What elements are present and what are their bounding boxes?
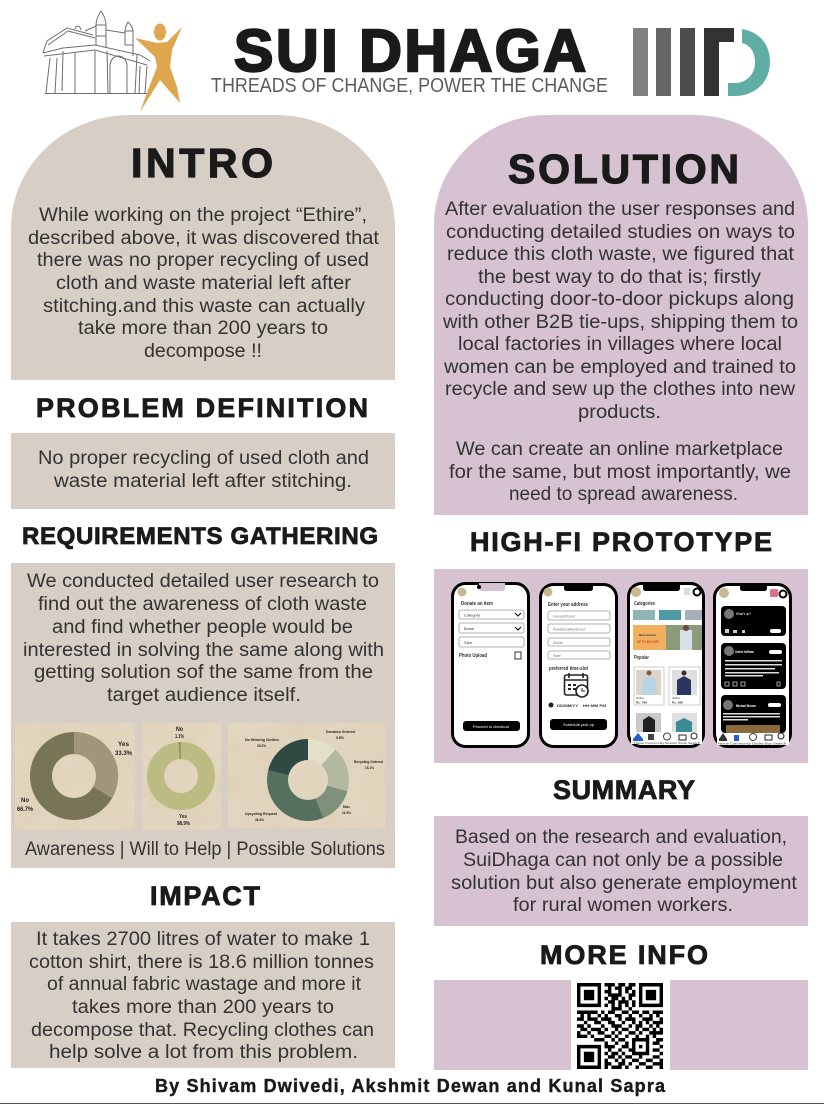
heading: more info: MORE INFO (540, 940, 708, 970)
phone: enter your address: Schedule pick up (563, 722, 595, 727)
heading: requirements gathering: REQUIREMENTS GATHERING (22, 523, 378, 550)
chart: awareness donut: No (21, 798, 29, 804)
panel: impact: takes more than 200 years to (72, 997, 334, 1018)
phone: donate an item: Brand (464, 626, 474, 631)
requirements text (23, 571, 384, 706)
phone: categories and popular: Categories (634, 601, 655, 607)
panel: impact: It takes 2700 litres of water to make 1 (36, 929, 370, 950)
phone: categories and popular: UP TO 60% OFF (637, 640, 660, 644)
heading: intro: INTRO (131, 140, 273, 186)
solution text: conducting door-to-door pickups along (445, 289, 794, 310)
solution text: local factories in villages where local (458, 334, 782, 355)
panel: impact: help solve a lot from this problem. (49, 1042, 358, 1063)
chart: will to help donut: No (176, 727, 183, 733)
phone: enter your address (540, 584, 616, 746)
phone: enter your address: District (553, 640, 564, 645)
intro text: stitching.and this waste can actually (43, 296, 366, 317)
solution text: After evaluation the user responses and (445, 199, 795, 220)
phone: categories and popular (628, 583, 704, 746)
chart: will to help donut: 98.9% (177, 821, 190, 827)
heading: summary: SUMMARY (553, 775, 695, 805)
phone: enter your address: HH:MM PM (583, 703, 607, 708)
phone: categories and popular: Rs. 699 (672, 700, 683, 704)
solution text (442, 199, 798, 505)
heading: impact: IMPACT (150, 881, 260, 911)
requirements text: interested in solving the same along with (23, 640, 384, 661)
intro text: decompose !! (144, 341, 262, 362)
phone: community feed: Michael Brown (736, 704, 756, 708)
solution text: reduce this cloth waste, we figured that (447, 244, 795, 265)
panel: impact: decompose that. Recycling clothes can (31, 1020, 374, 1041)
subtitle: THREADS OF CHANGE, POWER THE CHANGE (211, 75, 608, 97)
solution text: conducting detailed studies on ways to (446, 222, 795, 243)
requirements text: getting solution sof the same from the (34, 662, 373, 683)
chart: possible solutions donut: Recycling Ordered (354, 760, 383, 764)
phone: enter your address: DD/MM/YY (557, 703, 578, 708)
phone: enter your address: Enter your address (548, 602, 588, 608)
phone: categories and popular: Mens fashion (639, 633, 656, 637)
phone: enter your address: preferred time-slot (549, 666, 588, 672)
phone: enter your address: Area/locality/street (553, 626, 586, 632)
panel: problem definition (11, 433, 395, 509)
phone: categories and popular: Rs. 799 (636, 700, 647, 704)
solution text: the best way to do that is; firstly (478, 267, 762, 288)
panel: impact (11, 922, 395, 1068)
intro text (28, 205, 380, 362)
chart: awareness donut: 33.3% (115, 751, 133, 757)
solution text: recycle and sew up the clothes into new (445, 379, 795, 400)
phone: categories and popular: Popular (634, 655, 649, 661)
chart: will to help donut (142, 723, 221, 830)
logo: golden figure (135, 24, 182, 112)
phone: community feed: Home Community Outfits Buy Search (718, 742, 787, 746)
panel: summary: solution but also generate employment (451, 873, 798, 894)
chart: possible solutions donut: Misc (343, 805, 350, 809)
chart: possible solutions donut (228, 723, 385, 828)
phone: community feed (714, 584, 790, 746)
chart: awareness donut (15, 723, 135, 830)
requirements text: and find whether people would be (52, 617, 353, 638)
solution text: for the same, but most importantly, we (449, 462, 791, 483)
heading: solution: SOLUTION (508, 146, 739, 192)
chart: will to help donut: Yes (179, 814, 187, 820)
chart: possible solutions donut: Upcycling Request (245, 812, 278, 816)
chart: awareness donut: 66.7% (17, 807, 34, 813)
panel: problem definition: No proper recycling of used cloth and (38, 448, 369, 469)
logo: IIITD (633, 28, 770, 96)
phone: categories and popular: Shirts (672, 696, 681, 700)
phone: categories and popular: Shirts (636, 696, 645, 700)
chart: possible solutions donut: 15.1% (365, 766, 375, 770)
QR code (577, 983, 663, 1069)
chart caption: Awareness | Will to Help | Possible Solutions (25, 839, 385, 860)
phone: donate an item: Donate an item (461, 601, 493, 607)
panel: summary: for rural women workers. (513, 895, 733, 916)
solution text: with other B2B tie-ups, shipping them to (442, 312, 798, 333)
panel: solution (434, 115, 808, 515)
panel: intro (11, 115, 395, 380)
requirements text: find out the awareness of cloth waste (38, 594, 367, 615)
solution text: products. (578, 402, 661, 423)
intro text: take more than 200 years to (78, 318, 328, 339)
panel: high-fi prototype (434, 569, 808, 763)
heading: problem definition: PROBLEM DEFINITION (36, 393, 368, 423)
intro text: there was no proper recycling of used (37, 250, 369, 271)
chart: possible solutions donut: 20.2% (257, 744, 267, 748)
solution text: We can create an online marketplace (456, 439, 783, 460)
title: SUI DHAGA (234, 18, 586, 84)
panel: impact: of annual fabric wastage and more it (47, 974, 362, 995)
solution text: need to spread awareness. (509, 484, 738, 505)
intro text: described above, it was discovered that (28, 228, 380, 249)
phone: donate an item: Photo Upload (459, 653, 487, 659)
chart: possible solutions donut: 11.9% (342, 811, 352, 815)
intro text: cloth and waste material left after (56, 273, 352, 294)
phone: community feed: What's up? (736, 612, 751, 616)
chart: will to help donut: 1.1% (175, 734, 184, 740)
panel: impact: cotton shirt, there is 18.6 million tonnes (29, 952, 374, 973)
intro text: While working on the project “Ethire”, (39, 205, 367, 226)
chart: possible solutions donut: 38.4% (255, 818, 265, 822)
panel: more info (434, 980, 808, 1070)
panel: summary: SuiDhaga can not only be a possible (463, 850, 783, 871)
panel: requirements gathering (11, 563, 395, 868)
phone: donate an item: Proceed to checkout (473, 724, 510, 729)
chart: awareness donut: Yes (118, 742, 130, 748)
panel: summary (434, 816, 808, 926)
chart: possible solutions donut: 9.8% (336, 736, 345, 740)
requirements text: target audience itself. (107, 685, 301, 706)
panel: summary: Based on the research and evaluation, (455, 827, 787, 848)
phone: donate an item: Category (464, 612, 480, 618)
phone: enter your address: State (553, 653, 562, 658)
chart: possible solutions donut: Donation Ordered (326, 730, 355, 734)
chart: possible solutions donut: No Wearing Clothes (245, 738, 279, 742)
footer credits: By Shivam Dwivedi, Akshmit Dewan and Kunal Sapra (155, 1076, 666, 1096)
phone: donate an item: Size (464, 640, 473, 645)
phone: donate an item (452, 583, 528, 746)
phone: community feed: Ondrei Hoffman (735, 650, 754, 654)
phone: enter your address: House/Room (553, 614, 576, 618)
requirements text: We conducted detailed user research to (27, 571, 379, 592)
heading: high-fi prototype: HIGH-FI PROTOTYPE (470, 527, 772, 557)
solution text: women can be employed and trained to (443, 357, 796, 378)
logo: Gateway of India line drawing (43, 11, 150, 94)
phone: categories and popular: Home Community Events Shop Search (634, 742, 701, 745)
panel: problem definition: waste material left after stitching. (53, 471, 352, 492)
